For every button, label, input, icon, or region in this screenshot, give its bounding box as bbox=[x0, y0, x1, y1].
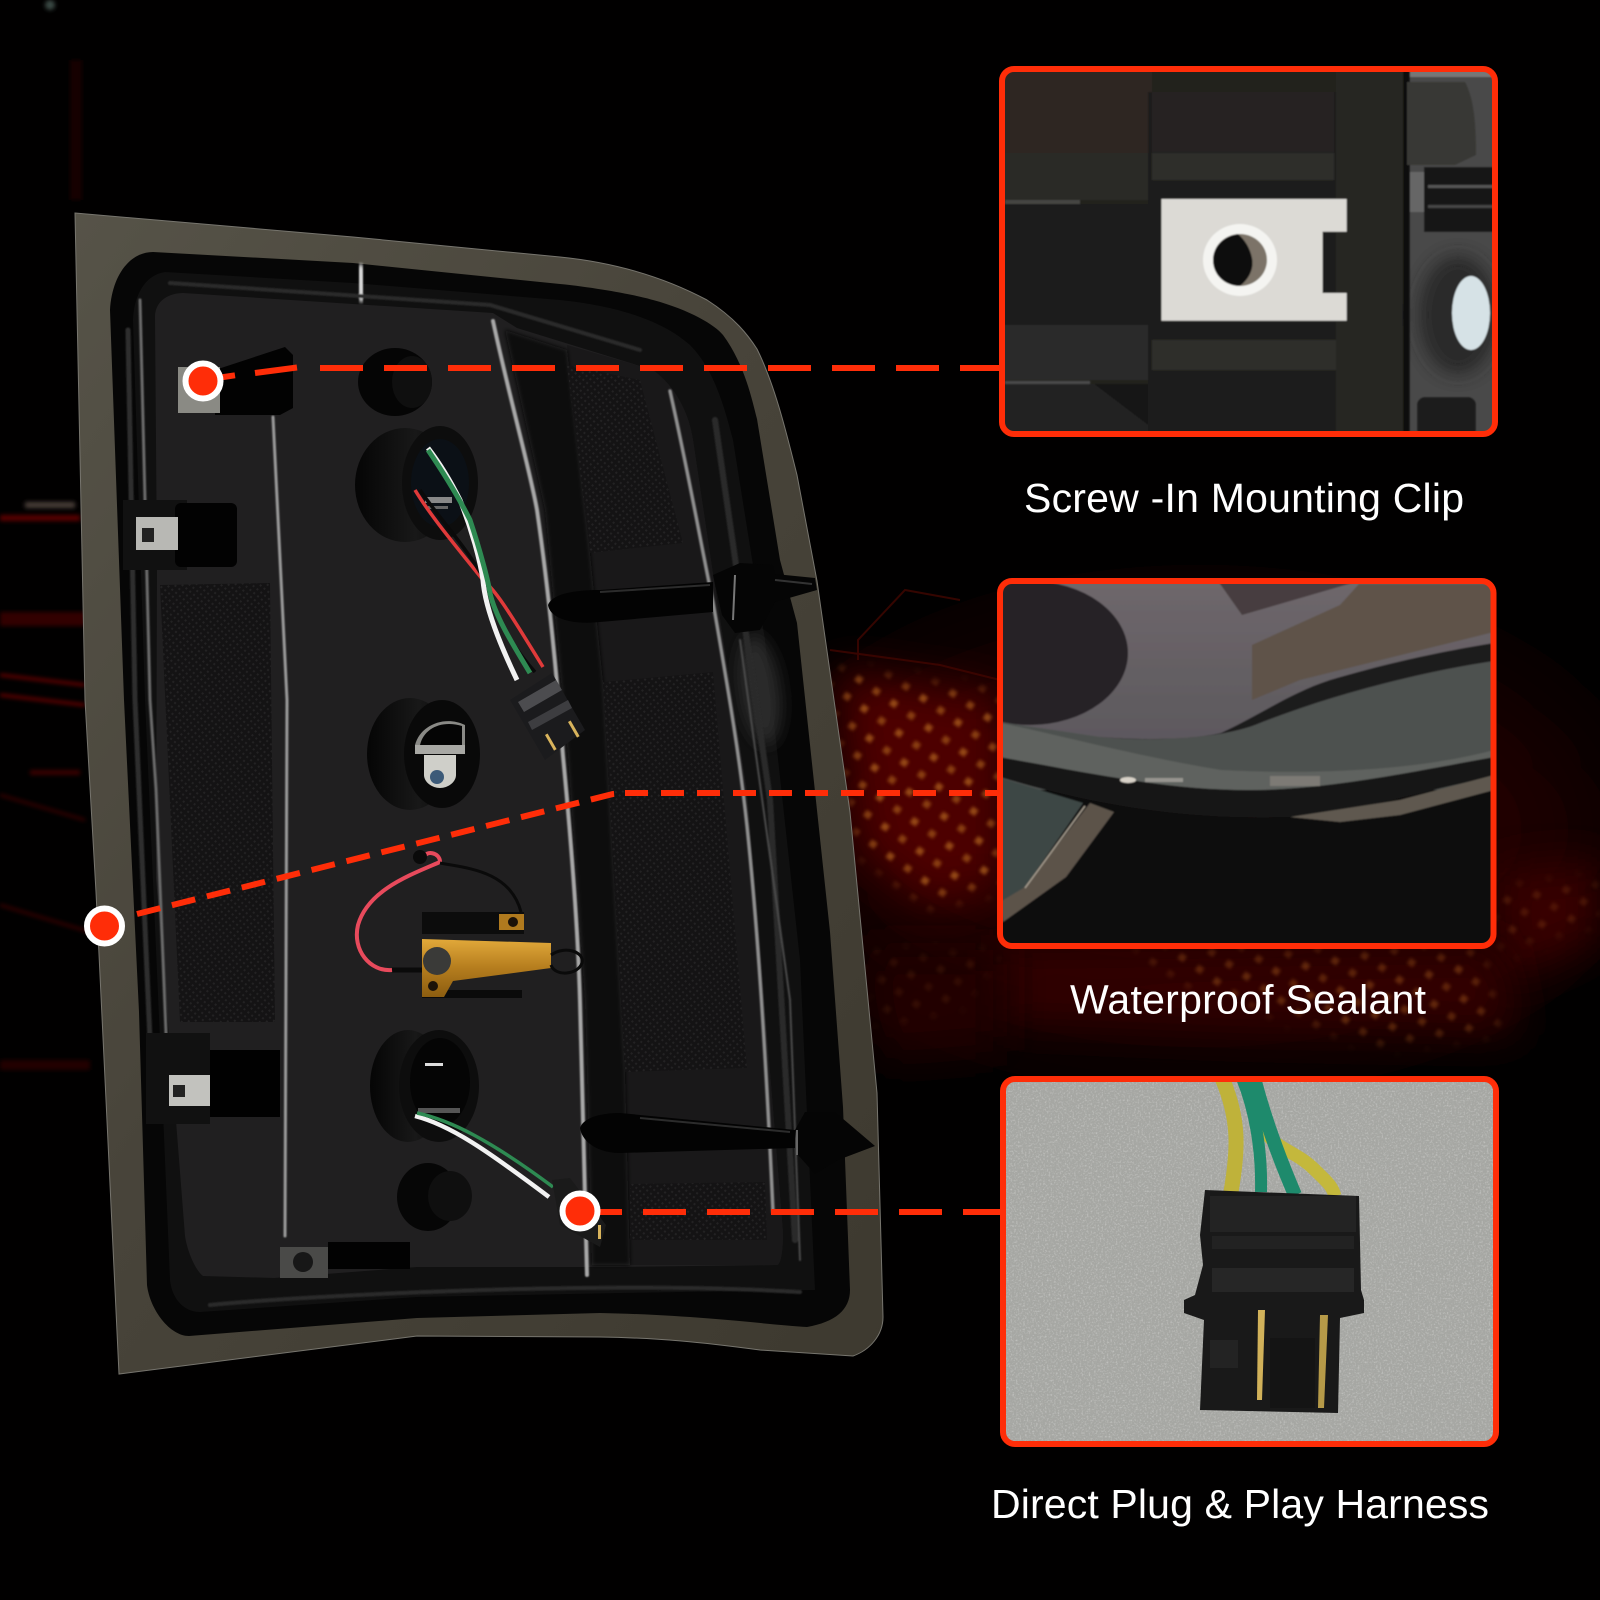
center block bbox=[1148, 92, 1336, 380]
black housing rim bbox=[110, 252, 850, 1336]
mounting clip left upper bbox=[123, 500, 237, 570]
mounting clip top-left bbox=[178, 347, 293, 415]
lower wire connector bbox=[552, 1178, 606, 1247]
marker dot 3 bbox=[562, 1194, 598, 1228]
mesh patches bbox=[160, 365, 767, 1240]
bottom dark area bbox=[1000, 790, 1494, 946]
inner plate bbox=[155, 293, 783, 1278]
sealant tube bbox=[1000, 723, 1494, 822]
dark stripe bbox=[1213, 643, 1490, 735]
marker dot 1 bbox=[186, 364, 220, 398]
lower mounting stud bbox=[580, 1112, 875, 1174]
heading: Direct Plug & Play Harness: Direct Plug & Play Harness bbox=[991, 1481, 1489, 1527]
bottom screw clip bbox=[280, 1242, 410, 1278]
socket cup 1 with wires bbox=[355, 426, 543, 680]
top knob bbox=[358, 348, 432, 416]
rib highlights bbox=[128, 270, 800, 1305]
leader line 2 to waterproof sealant bbox=[137, 793, 998, 914]
upper mounting stud bbox=[548, 563, 817, 633]
glossy smudge on rim bbox=[733, 633, 787, 747]
mounting clip left lower bbox=[146, 1033, 280, 1124]
green-grey lens band bbox=[1000, 661, 1494, 790]
socket cup 2 with bracket bbox=[367, 698, 480, 810]
connector body bbox=[1184, 1190, 1364, 1413]
dark right plate zone bbox=[567, 345, 783, 1265]
harness connector on wires bbox=[510, 673, 585, 760]
tail light rear view bbox=[75, 213, 883, 1374]
panel: direct plug harness photo bbox=[1003, 1078, 1496, 1444]
leader line 1 to mounting clip bbox=[217, 368, 999, 378]
resistor and wires bbox=[357, 850, 582, 998]
heading: Waterproof Sealant: Waterproof Sealant bbox=[1070, 976, 1427, 1022]
wires bbox=[1222, 1078, 1335, 1196]
heading: Screw -In Mounting Clip: Screw -In Mounting Clip bbox=[1024, 475, 1464, 521]
right background hardware bbox=[1407, 69, 1498, 437]
smoked lens outer flange bbox=[75, 213, 883, 1374]
leader line 3 to harness bbox=[597, 1209, 1001, 1215]
bottom knob bbox=[397, 1163, 472, 1231]
socket cup 3 with wires bbox=[370, 1030, 553, 1197]
gold pins bbox=[1257, 1310, 1328, 1408]
marker dot 2 bbox=[87, 908, 122, 944]
background: black with red circuit glow bbox=[0, 0, 1600, 1076]
dark channel bbox=[505, 330, 630, 1265]
mounting bolt bbox=[1452, 276, 1490, 350]
left teal wedge bbox=[1000, 778, 1083, 905]
panel: waterproof sealant photo bbox=[932, 581, 1494, 946]
panel: screw-in mounting clip photo bbox=[1002, 69, 1498, 437]
white clip plate bbox=[1162, 199, 1347, 321]
